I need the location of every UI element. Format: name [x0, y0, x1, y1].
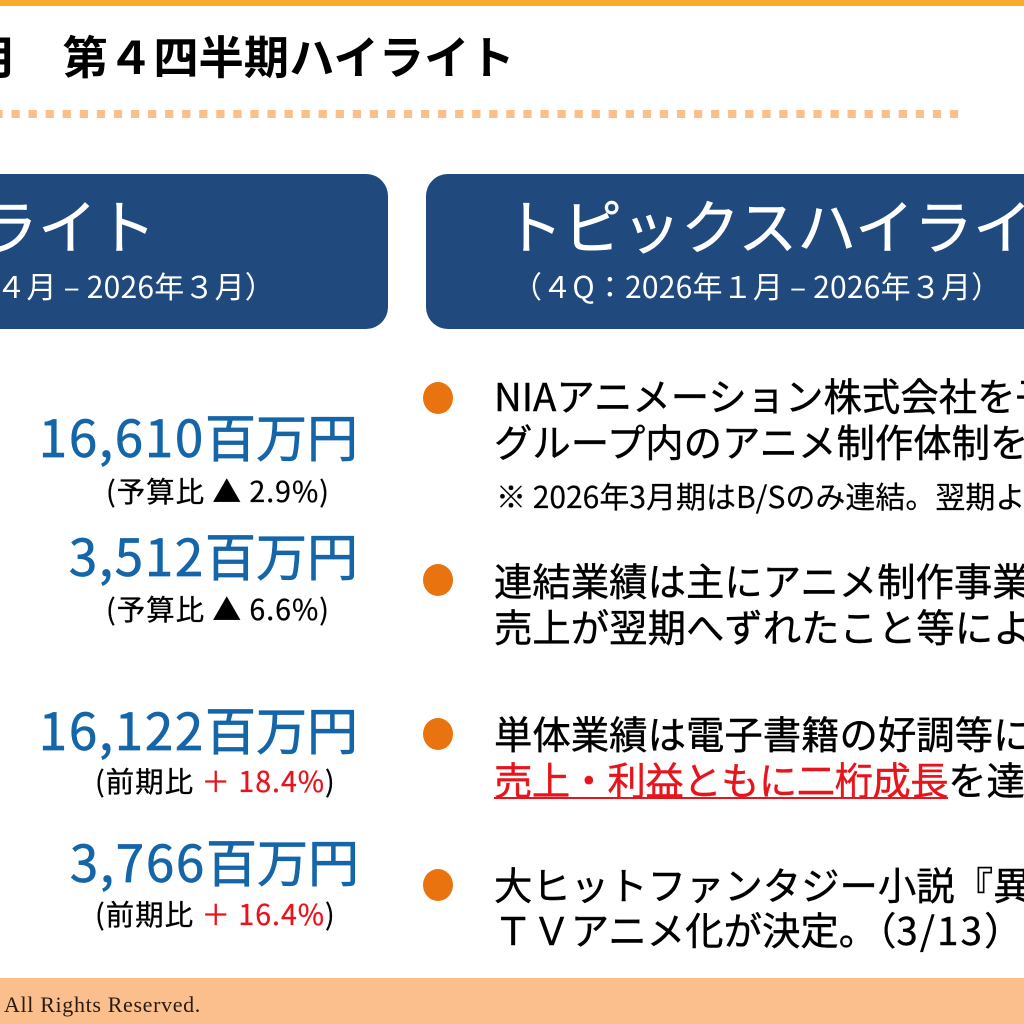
topic 2 line 2: 売上が翌期へずれたこと等によ — [494, 598, 1024, 654]
metric: 16,122: 16,122百万円 — [39, 691, 358, 765]
topic 1 note: ※ 2026年3月期はB/Sのみ連結。翌期よ — [496, 473, 1024, 517]
topic 3 line 2: 売上・利益ともに二桁成長を達 — [494, 751, 1024, 807]
right header period: （４Q：2026年１月 – 2026年３月） — [512, 263, 1001, 307]
top accent bar — [0, 0, 1024, 6]
bullet 3 — [423, 718, 453, 750]
panel: left header — [0, 174, 388, 329]
bullet 1 — [423, 382, 453, 414]
metric: 3,766: 3,766百万円 — [70, 823, 359, 897]
metric note: budget 6.6: (予算比 ▲ 6.6%) — [106, 588, 330, 629]
metric note: yoy 16.4: (前期比 ＋ 16.4%) — [95, 893, 336, 934]
copyright: All Rights Reserved. — [4, 992, 201, 1017]
topic 4 line 2: ＴＶアニメ化が決定。（3/13） — [494, 901, 1023, 957]
bullet 4 — [423, 869, 453, 901]
panel: right header — [426, 174, 1024, 329]
bullet 2 — [423, 564, 453, 596]
topic 4 line 1: 大ヒットファンタジー小説『異 — [494, 856, 1024, 912]
metric note: yoy 18.4: (前期比 ＋ 18.4%) — [95, 760, 336, 801]
metric note: budget 2.9: (予算比 ▲ 2.9%) — [106, 470, 330, 511]
dotted divider — [0, 110, 959, 118]
topic 3 line 1: 単体業績は電子書籍の好調等に — [494, 705, 1024, 761]
footer bar — [0, 978, 1024, 1024]
topic 2 line 1: 連結業績は主にアニメ制作事業 — [494, 552, 1024, 608]
topic 1 line 2: グループ内のアニメ制作体制を — [494, 413, 1024, 469]
metric: 3,512: 3,512百万円 — [69, 517, 358, 591]
metric: 16,610: 16,610百万円 — [39, 398, 358, 472]
